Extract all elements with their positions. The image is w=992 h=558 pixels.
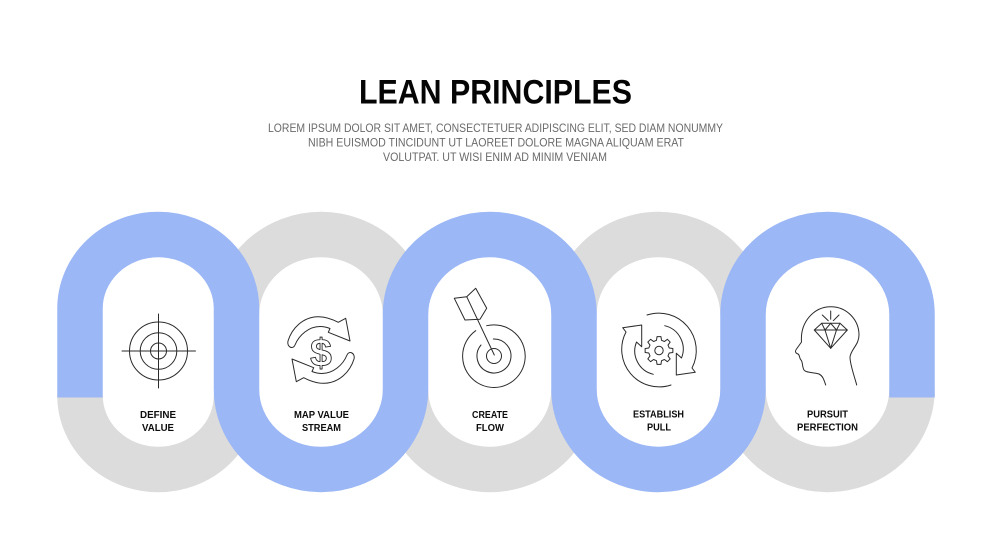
label: pursuit perfection: PERFECTION [797, 422, 858, 434]
step 3: create flow [454, 288, 525, 434]
label: create flow: FLOW [476, 422, 504, 434]
icon: crosshair target [122, 314, 196, 388]
step 2: map value stream [288, 317, 354, 434]
grey ribbon segments [80, 234, 912, 470]
icon: head with diamond [796, 307, 859, 385]
label: establish pull [633, 408, 684, 434]
label: map value stream: STREAM [302, 422, 341, 434]
label: establish pull: PULL [647, 422, 672, 434]
step 5: pursuit perfection [796, 307, 859, 434]
label: pursuit perfection: PURSUIT [807, 408, 849, 420]
label: create flow: CREATE [472, 409, 508, 421]
label: create flow [472, 409, 508, 434]
subtitle text block: VOLUTPAT. UT WISI ENIM AD MINIM VENIAM [383, 152, 607, 164]
subtitle text block [268, 123, 723, 164]
label: map value stream: MAP VALUE [294, 409, 349, 421]
icon: dart in target [454, 288, 525, 387]
blue ribbon [80, 234, 912, 470]
label: map value stream [294, 409, 349, 434]
title: LEAN PRINCIPLES [359, 74, 632, 112]
label: define value: DEFINE [140, 409, 176, 421]
step 1: define value [122, 314, 196, 434]
icon: gear with cycle arrows [622, 313, 696, 387]
label: define value: VALUE [142, 422, 174, 434]
subtitle text block: LOREM IPSUM DOLOR SIT AMET, CONSECTETUER ADIPISCING ELIT, SED DIAM NONUMMY [268, 123, 723, 135]
label: pursuit perfection [797, 408, 858, 434]
label: establish pull: ESTABLISH [633, 408, 684, 420]
subtitle text block: NIBH EUISMOD TINCIDUNT UT LAOREET DOLORE MAGNA ALIQUAM ERAT [308, 138, 684, 150]
icon: dollar with cycle arrows: $ [310, 332, 332, 375]
label: define value [140, 409, 176, 434]
step 4: establish pull [622, 313, 696, 434]
